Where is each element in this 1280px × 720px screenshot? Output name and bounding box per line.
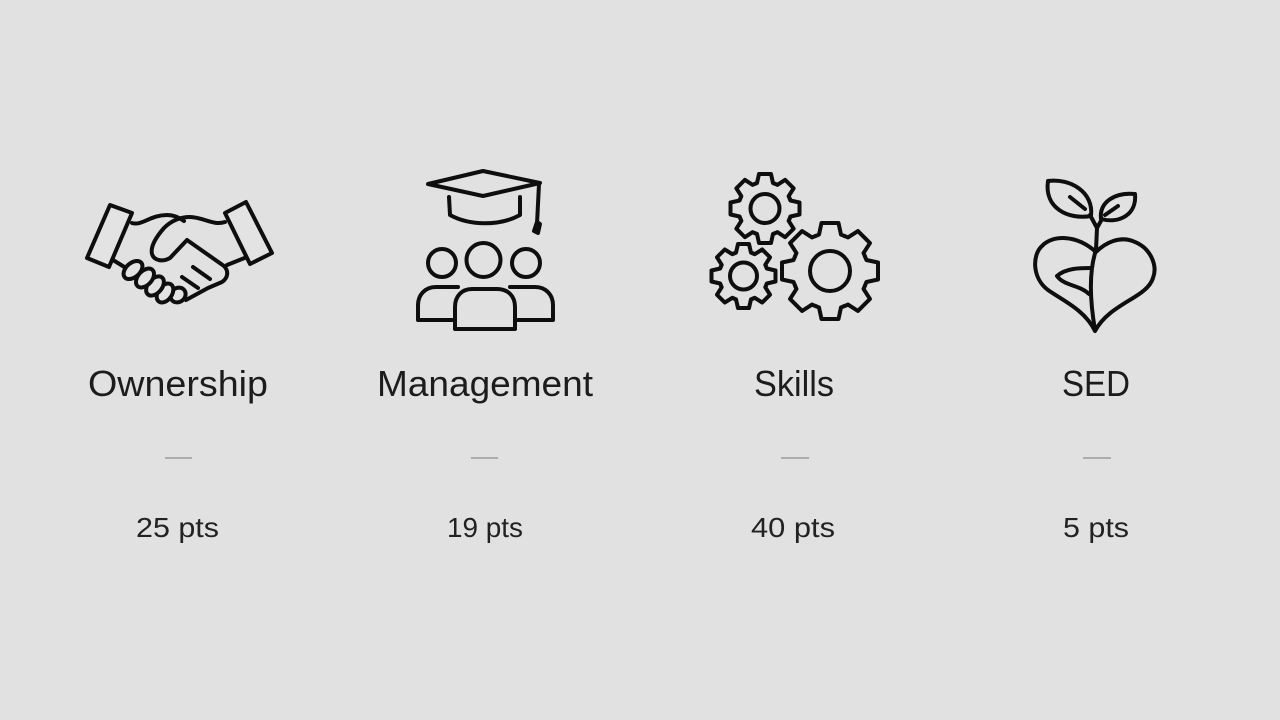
panel: Skills: [712, 174, 878, 543]
icon: heart with sprout: [1035, 181, 1154, 331]
panel: Ownership: [87, 202, 272, 543]
label: Skills: Skills: [754, 363, 834, 404]
value: 5 pts: 5 pts: [1063, 512, 1129, 543]
label: Management: Management: [377, 363, 593, 404]
label: Ownership: Ownership: [88, 363, 268, 404]
panel: Management: [377, 171, 593, 543]
value: 19 pts: 19 pts: [447, 512, 523, 543]
icon: graduation cap and people: [418, 171, 553, 329]
value: 40 pts: 40 pts: [751, 512, 835, 543]
panel: SED: [1035, 181, 1154, 543]
icon: handshake: [87, 202, 272, 306]
label: SED: SED: [1062, 363, 1130, 404]
value: 25 pts: 25 pts: [136, 512, 219, 543]
icon: three gears: [712, 174, 878, 319]
